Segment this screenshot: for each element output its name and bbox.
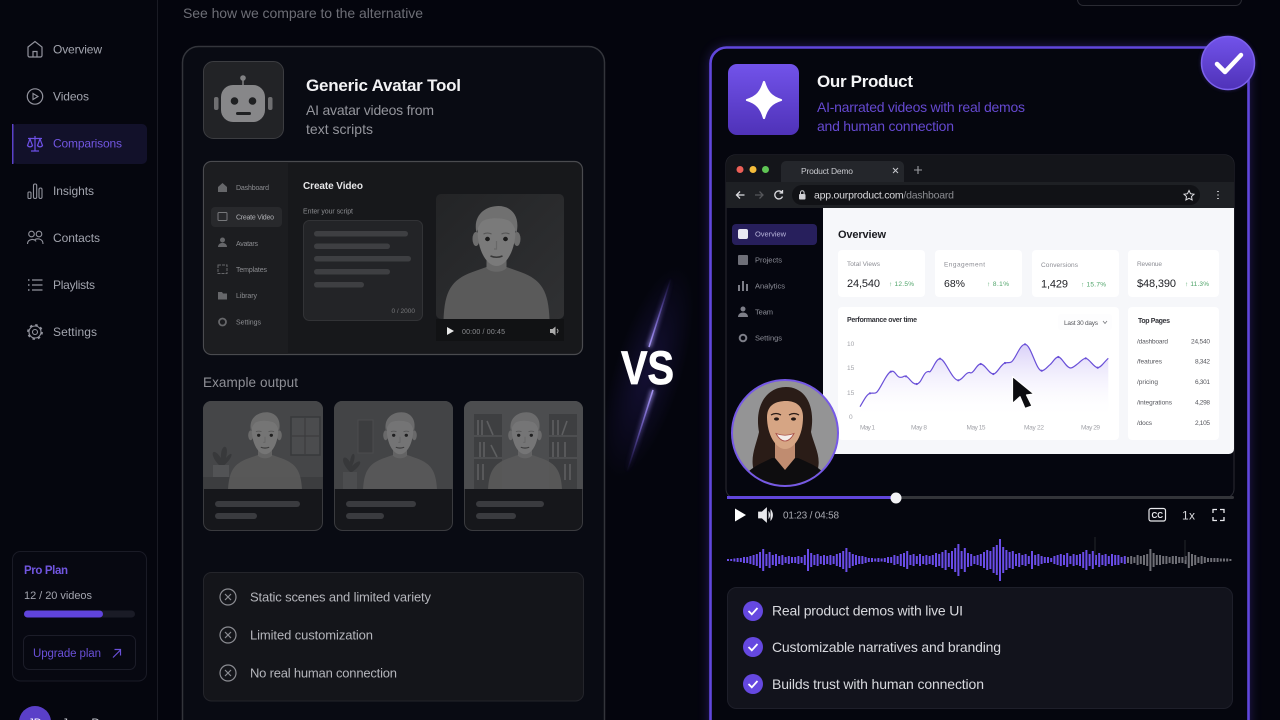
subtitle: See how we compare to the alternative (183, 5, 423, 21)
plan name: Pro Plan (24, 565, 68, 577)
stat: Total Views: Total Views (847, 261, 881, 268)
script label: Enter your script (303, 208, 353, 216)
avatar video preview: 00:00 / 00:45 (462, 329, 505, 336)
script input (304, 220, 422, 320)
limitations list (204, 572, 584, 701)
stat: Engagement: ↑ 8.1% (987, 281, 1009, 288)
top pages table: /docs (1137, 420, 1153, 427)
demo sidebar (732, 224, 817, 342)
avatar video preview (436, 194, 564, 341)
mock heading: Create Video (303, 181, 363, 192)
line chart: performance over time: May 22 (1024, 424, 1044, 432)
stat: Engagement (935, 250, 1022, 297)
icon: mouse cursor (1012, 376, 1034, 408)
user avatar (19, 706, 103, 720)
thumbnail 2 (334, 401, 453, 530)
stat: Engagement: Engagement (944, 262, 985, 268)
heading: Generic Avatar Tool: Generic Avatar Tool (306, 76, 461, 95)
mock sidebar items: Library (236, 293, 258, 300)
benefit 1 (743, 601, 963, 621)
presenter portrait (732, 380, 838, 492)
line chart: performance over time: 15 (847, 365, 855, 372)
description: text scripts (306, 121, 373, 137)
demo sidebar: Settings (755, 334, 782, 342)
demo sidebar: Overview (755, 230, 787, 238)
VS divider (583, 257, 713, 487)
nav item: Playlists: Playlists (53, 278, 95, 292)
top pages table: 24,540 (1191, 338, 1210, 346)
nav item: Comparisons (active) (12, 124, 147, 164)
window controls (736, 166, 769, 173)
browser tab: Product Demo (801, 166, 853, 176)
address bar (792, 185, 1218, 205)
top pages table: /integrations (1137, 400, 1173, 406)
stat: Engagement: 68% (944, 278, 965, 290)
audio waveform (728, 537, 1230, 581)
stat: Conversions (1032, 250, 1119, 297)
panel: generic avatar tool (182, 46, 604, 720)
top pages table: 2,105 (1195, 420, 1210, 427)
stat: Total Views: ↑ 12.5% (889, 281, 914, 288)
stat: Conversions: Conversions (1041, 262, 1079, 269)
top pages table: /dashboard (1137, 338, 1168, 346)
top pages table: /features (1137, 358, 1163, 366)
limitation 2: Limited customization (250, 628, 373, 642)
stat: Total Views (838, 250, 925, 297)
progress bar (727, 492, 1234, 504)
nav item: Overview: Overview (53, 42, 102, 56)
description: and human connection (817, 118, 954, 134)
top right button (1078, 0, 1242, 6)
mock sidebar items: Dashboard (236, 185, 269, 192)
mock sidebar items: Settings (236, 320, 262, 326)
demo sidebar: Team (755, 308, 773, 316)
thumbnail 1 (203, 401, 323, 530)
stat: Revenue: ↑ 11.3% (1185, 281, 1209, 288)
mock sidebar items (218, 183, 274, 326)
line chart: performance over time: 10 (847, 341, 855, 348)
top pages table: 8,342 (1195, 358, 1210, 366)
nav item: Videos (27, 89, 89, 104)
line chart: performance over time: 15 (847, 390, 855, 397)
demo sidebar: Projects (755, 256, 782, 264)
video controls (735, 508, 1224, 522)
dashboard title: Overview (838, 229, 886, 241)
mock sidebar items: Create Video (236, 214, 274, 222)
panel: our product (710, 36, 1254, 720)
timecode: 01:23 / 04:58 (783, 510, 839, 522)
benefits list (728, 588, 1232, 708)
description (306, 102, 434, 137)
line chart: performance over time: May 8 (911, 424, 927, 432)
stat: Total Views: 24,540 (847, 278, 880, 290)
script input: 0 / 2000 (392, 308, 415, 315)
nav item: Videos: Videos (53, 90, 89, 104)
line chart: performance over time: 0 (849, 414, 853, 421)
captions button (1149, 508, 1166, 521)
VS text: VS (621, 341, 674, 394)
line chart: performance over time: Last 30 days (1064, 320, 1099, 327)
playback speed: 1x (1182, 508, 1195, 522)
benefit 2: Customizable narratives and branding (772, 639, 1001, 655)
top pages table: 4,298 (1195, 400, 1210, 406)
nav item: Insights (28, 184, 94, 198)
top pages table: 6,301 (1195, 379, 1210, 386)
description (817, 99, 1025, 134)
top pages table (1128, 307, 1219, 440)
navigation buttons (736, 190, 782, 199)
stat: Conversions: ↑ 15.7% (1081, 282, 1106, 288)
nav item: Settings (28, 325, 97, 339)
nav item: Insights: Insights (53, 184, 94, 198)
stat: Revenue (1128, 250, 1219, 297)
example output label: Example output (203, 375, 298, 390)
mock sidebar items: Templates (236, 267, 268, 274)
sidebar (0, 0, 158, 720)
line chart: performance over time (838, 307, 1119, 440)
stat: Conversions: 1,429 (1041, 278, 1068, 290)
mockup: create video screen (204, 162, 582, 354)
dashboard content (823, 208, 1234, 454)
captions button: CC (1152, 511, 1163, 520)
icon: robot (204, 62, 284, 138)
line chart: performance over time: May 1 (860, 424, 875, 432)
icon: play (735, 508, 746, 522)
benefit 1: Real product demos with live UI (772, 602, 963, 618)
description: AI-narrated videos with real demos (817, 99, 1025, 115)
icon: sparkle (728, 64, 799, 135)
mock sidebar items: Avatars (236, 241, 258, 248)
icon: fullscreen (1213, 510, 1224, 520)
plan card (12, 552, 146, 681)
top pages table: /pricing (1137, 379, 1158, 386)
limitation 3: No real human connection (250, 666, 397, 680)
nav item: Contacts: Contacts (53, 231, 100, 245)
address bar: app.ourproduct.com/dashboard (814, 190, 954, 202)
nav item: Settings: Settings (53, 325, 97, 339)
description: AI avatar videos from (306, 102, 434, 118)
nav item: Comparisons (active): Comparisons (53, 136, 122, 150)
line chart: performance over time: May 15 (966, 424, 986, 432)
stat: Revenue: Revenue (1137, 261, 1162, 268)
line chart: performance over time: May 29 (1081, 424, 1100, 432)
demo sidebar: Analytics (755, 282, 785, 290)
usage count: 12 / 20 videos (24, 590, 92, 602)
nav item: Playlists (28, 278, 95, 292)
usage bar (24, 610, 135, 618)
nav item: Contacts (28, 231, 100, 245)
top pages table: Top Pages (1138, 318, 1170, 325)
thumbnail 3 (464, 401, 583, 530)
heading: Our Product: Our Product (817, 72, 913, 91)
nav item: Overview (28, 42, 102, 57)
upgrade button: Upgrade plan (33, 648, 101, 660)
check badge (1202, 36, 1254, 90)
browser demo video (726, 155, 1234, 504)
line chart: performance over time: Performance over time (847, 317, 917, 324)
stat: Revenue: $48,390 (1137, 278, 1176, 290)
benefit 3: Builds trust with human connection (772, 676, 984, 692)
browser tab (781, 161, 922, 182)
icon: volume (758, 508, 772, 522)
limitation 1: Static scenes and limited variety (250, 590, 432, 604)
